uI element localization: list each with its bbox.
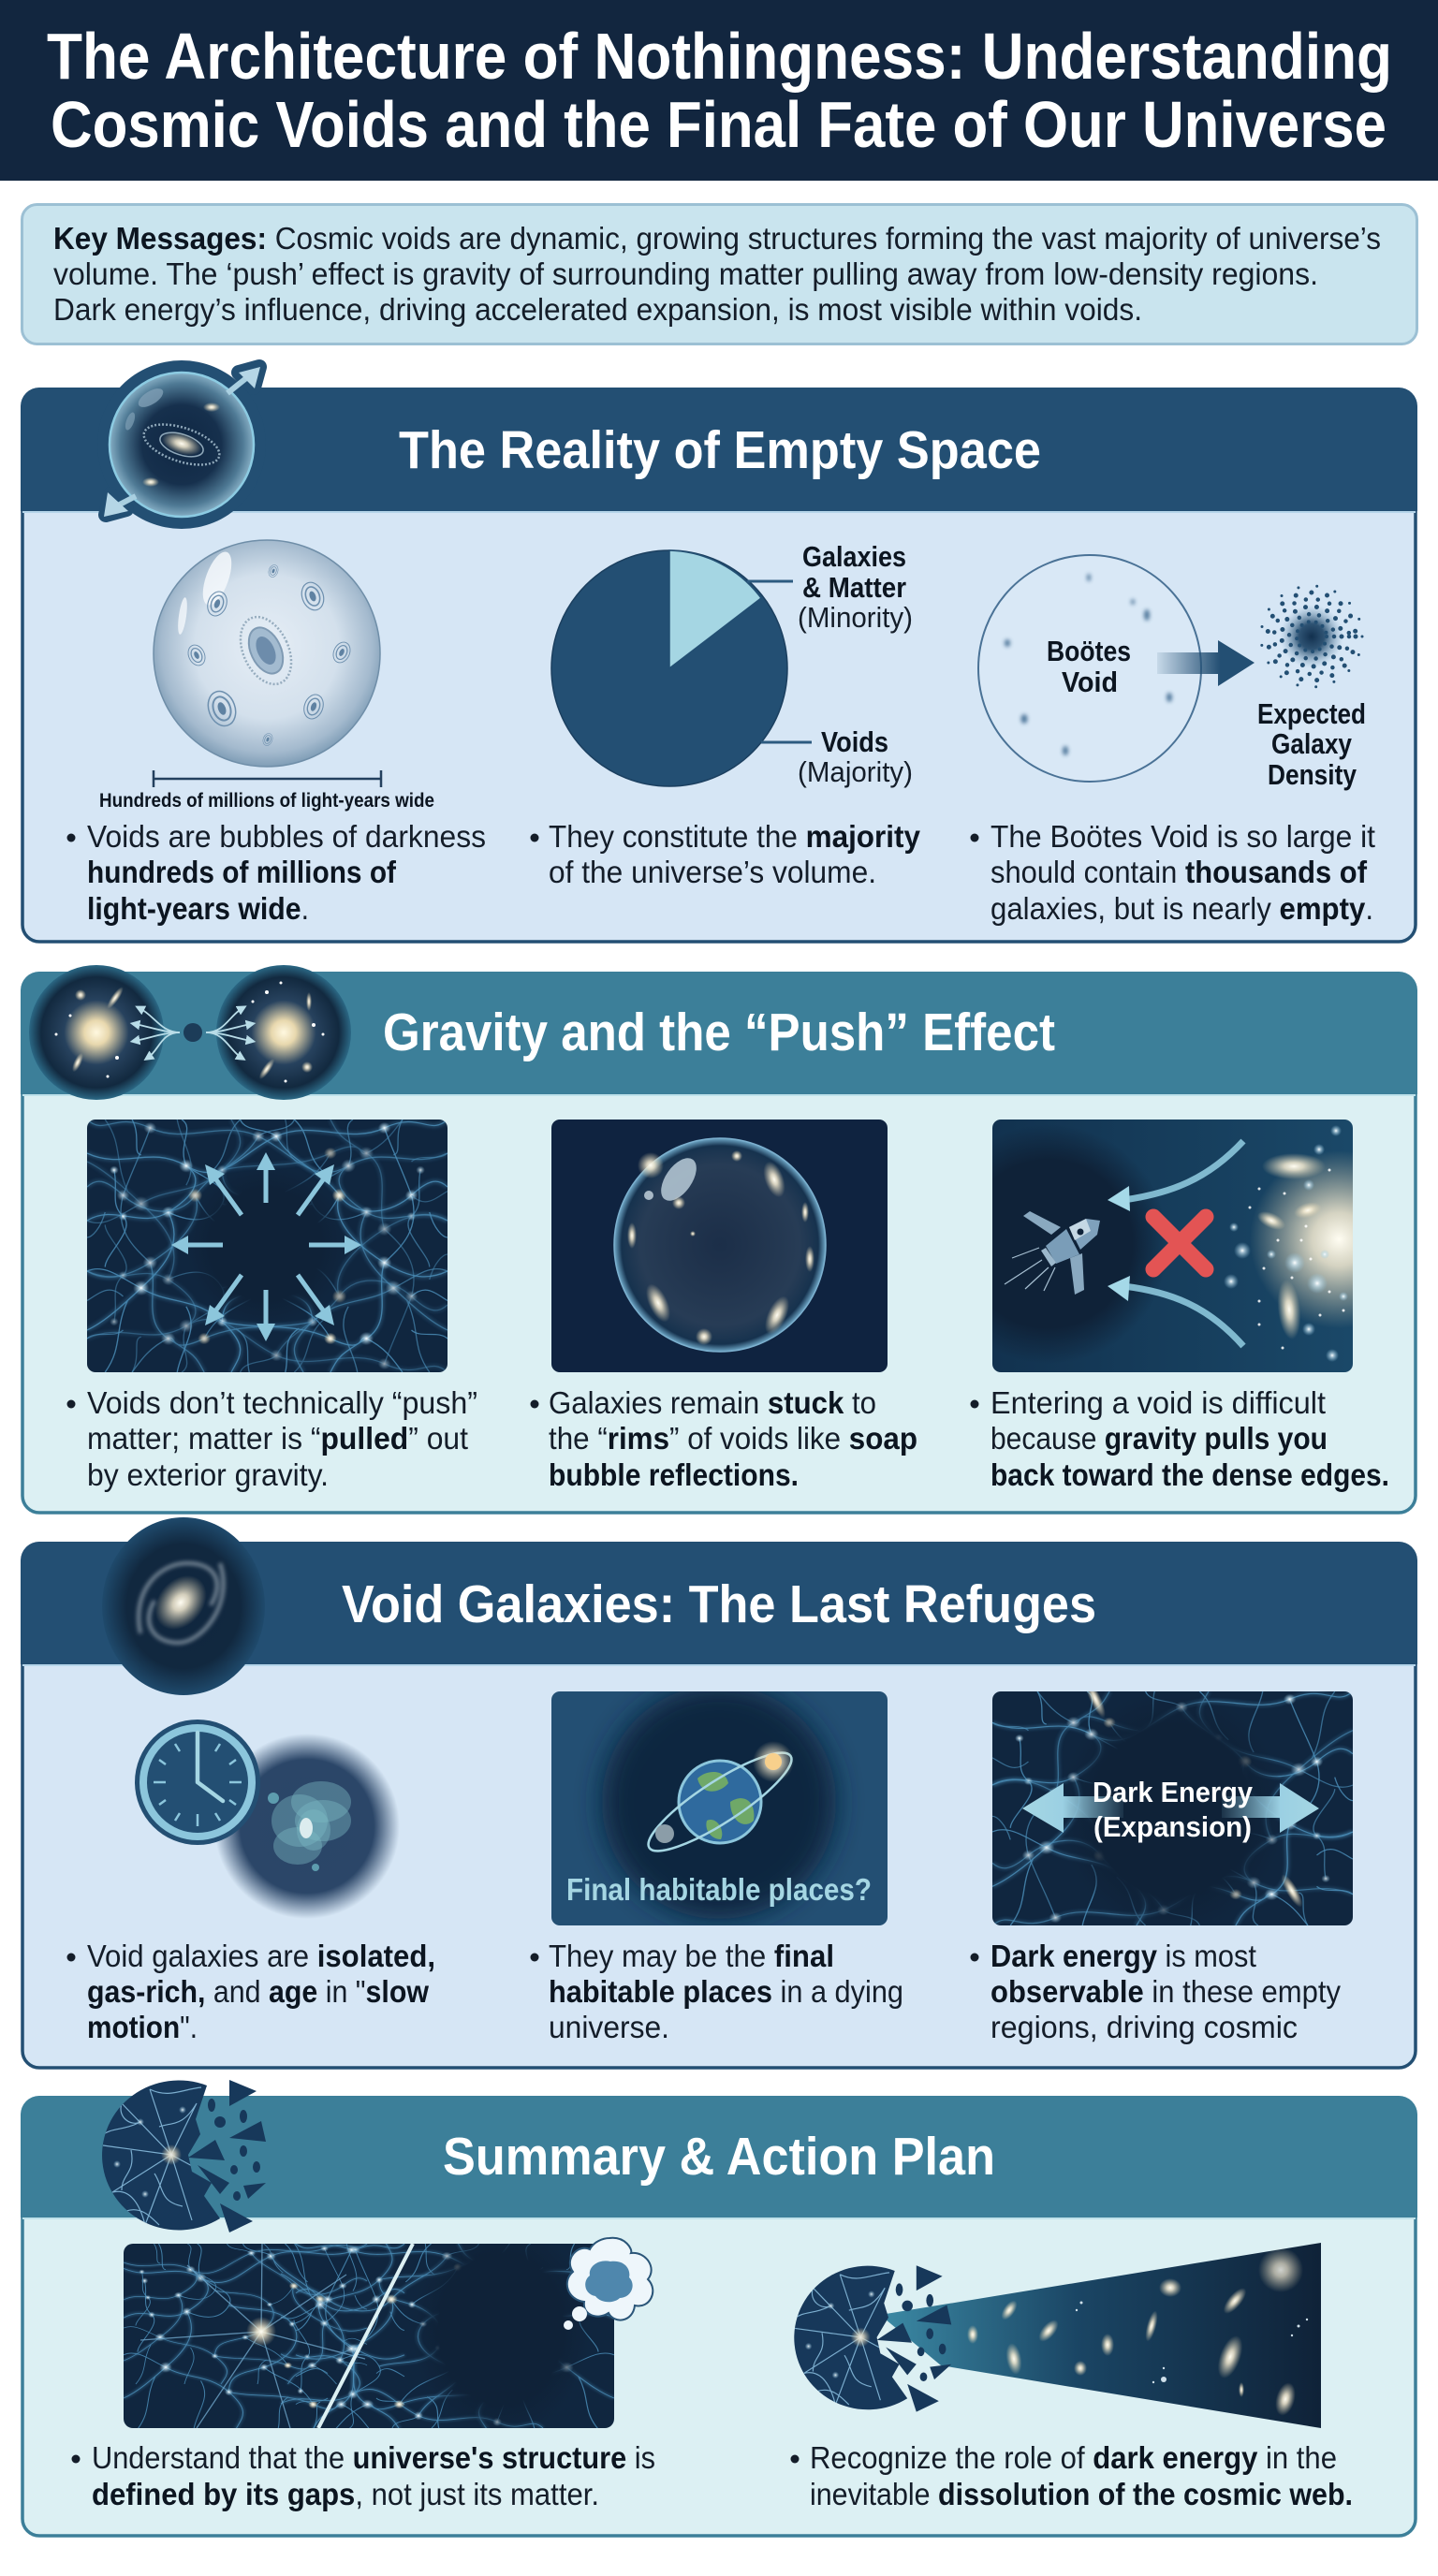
image: void with outward arrows in the cosmic web	[87, 1120, 448, 1372]
bullet: galaxies stuck to rims	[530, 1385, 917, 1492]
bullet: bubbles of darkness: Voids are bubbles of darkness	[87, 819, 486, 854]
illustration: bootes void vs expected density: Galaxy	[1271, 727, 1353, 760]
bullet: matter is pulled: by exterior gravity.	[87, 1457, 329, 1492]
panel: the reality of empty space	[21, 360, 1417, 942]
bullet: final habitable places	[530, 1939, 903, 2044]
bullet: defined by its gaps	[71, 2440, 655, 2511]
heading: summary and action plan: Summary & Action Plan	[443, 2127, 995, 2187]
bullet: dark energy observable: Dark energy is most	[990, 1939, 1256, 1973]
bullet: entering a void: Entering a void is difficult	[990, 1385, 1326, 1420]
label: voids: Voids	[821, 725, 888, 758]
image: habitable planet	[551, 1685, 888, 1925]
bullet: matter is pulled: matter; matter is “pulled” out	[87, 1421, 468, 1456]
icon: spiral galaxy	[102, 1517, 265, 1695]
bullet: entering a void	[970, 1385, 1389, 1492]
illustration: bootes void vs expected density: Boötes	[1047, 635, 1131, 667]
bullet: role of dark energy: Recognize the role of dark energy in the	[810, 2440, 1337, 2475]
image: dark energy expansion: Dark Energy	[1093, 1776, 1254, 1808]
bullet: bootes void	[970, 819, 1375, 926]
icon: earth with orbit	[638, 1739, 801, 1865]
image: web with a void and thought bubble	[124, 2237, 653, 2428]
bullet: matter is pulled: Voids don’t technically “push”	[87, 1385, 477, 1420]
label: galaxies and matter: (Minority)	[798, 601, 913, 634]
bullet: bootes void: should contain thousands of	[990, 855, 1368, 889]
arrows: matter pulled outward	[171, 1152, 361, 1341]
icon: thought bubble	[564, 2238, 653, 2330]
bullet: matter is pulled	[67, 1385, 477, 1492]
bullet: defined by its gaps: defined by its gaps, not just its matter.	[92, 2477, 599, 2511]
bullet: final habitable places: universe.	[549, 2010, 669, 2044]
heading: gravity and the push effect: Gravity and the “Push” Effect	[383, 1003, 1055, 1062]
heading: void galaxies: Void Galaxies: The Last Refuges	[342, 1574, 1096, 1634]
illustration: bootes void vs expected density: Density	[1268, 758, 1357, 791]
bullet: galaxies stuck to rims: the “rims” of voids like soap	[549, 1421, 917, 1456]
panel: void galaxies	[21, 1517, 1417, 2068]
illustration: cosmic web dissolving	[793, 2243, 1321, 2428]
image: soap bubble with galaxies on the rim	[551, 1120, 888, 1372]
arrows: expansion	[1022, 1783, 1123, 1833]
image: spacecraft blocked from entering a void	[992, 1120, 1353, 1372]
bullet: bubbles of darkness	[67, 819, 486, 926]
bullet: isolated galaxies: Void galaxies are isolated,	[87, 1939, 435, 1973]
bullet: galaxies stuck to rims: Galaxies remain stuck to	[549, 1385, 876, 1420]
bullet: role of dark energy: inevitable dissolution of the cosmic web.	[810, 2477, 1353, 2511]
icon: spacecraft	[1005, 1211, 1100, 1295]
illustration: bootes void vs expected density: Void	[1062, 666, 1118, 698]
label: voids: (Majority)	[798, 755, 913, 788]
panel: summary and action plan	[21, 2080, 1417, 2536]
bullet: majority of volume: of the universe’s volume.	[549, 855, 876, 889]
bullet: role of dark energy	[790, 2440, 1353, 2511]
label: galaxies and matter: Galaxies	[802, 540, 906, 573]
bullet: bubbles of darkness: light-years wide.	[87, 891, 309, 926]
image: dark energy expansion: (Expansion)	[1093, 1810, 1252, 1843]
icon: expected galaxy density cloud	[1261, 586, 1362, 687]
bullet: entering a void: back toward the dense edges.	[990, 1457, 1389, 1492]
bullet: dark energy observable: observable in these empty	[990, 1974, 1341, 2009]
illustration: void bubble with galaxies	[154, 540, 380, 767]
header band	[0, 0, 1438, 181]
bullet: isolated galaxies: motion".	[87, 2010, 198, 2044]
label: galaxies and matter: & Matter	[802, 571, 906, 604]
bullet: majority of volume	[530, 819, 921, 889]
bullet: isolated galaxies	[67, 1939, 435, 2044]
key messages callout: Key Messages: Cosmic voids are dynamic, growing structures forming the vast majority of universe’s	[53, 221, 1381, 256]
icon: clock and gas-rich galaxy	[135, 1720, 400, 1919]
illustration: bootes void vs expected density	[978, 555, 1366, 791]
bullet: isolated galaxies: gas-rich, and age in "slow	[87, 1974, 429, 2009]
bullet: dark energy observable	[970, 1939, 1341, 2044]
pie chart: voids vs matter	[551, 540, 913, 788]
image: dark energy expansion	[992, 1678, 1353, 1933]
icon: red x	[1153, 1217, 1206, 1269]
bullet: bubbles of darkness: hundreds of millions of	[87, 855, 397, 889]
bullet: majority of volume: They constitute the majority	[549, 819, 921, 854]
key messages callout: volume. The ‘push’ effect is gravity of surrounding matter pulling away from low-density regions.	[53, 256, 1318, 291]
label: voids	[798, 725, 913, 788]
image: habitable planet: Final habitable places?	[566, 1872, 872, 1907]
bullet: final habitable places: habitable places in a dying	[549, 1974, 903, 2009]
panel: gravity and the push effect	[21, 965, 1428, 1513]
icon: shattering cosmic web	[101, 2080, 266, 2232]
bullet: entering a void: because gravity pulls you	[990, 1421, 1328, 1456]
dissolving galaxies	[967, 2247, 1308, 2418]
label: galaxies and matter	[798, 540, 913, 634]
bullet: dark energy observable: regions, driving cosmic	[990, 2010, 1298, 2044]
scale bar: Hundreds of millions of light-years wide	[99, 790, 434, 812]
arrow	[1157, 640, 1255, 686]
icon: expanding bubble with galaxy	[97, 360, 266, 529]
title	[47, 20, 1392, 161]
bullet: galaxies stuck to rims: bubble reflections.	[549, 1457, 799, 1492]
bullet: bootes void: galaxies, but is nearly empty.	[990, 891, 1373, 926]
icon: two clusters pulling on a void	[29, 965, 351, 1100]
heading: the reality of empty space: The Reality of Empty Space	[399, 420, 1041, 480]
arrows: gravity pulling back	[1108, 1141, 1243, 1346]
bullet: defined by its gaps: Understand that the universe's structure is	[92, 2440, 655, 2475]
scale bar	[99, 770, 434, 812]
key messages callout	[22, 204, 1417, 344]
key messages callout: Dark energy’s influence, driving accelerated expansion, is most visible within voids.	[53, 292, 1142, 327]
bullet: final habitable places: They may be the final	[549, 1939, 834, 1973]
illustration: bootes void vs expected density: Expected	[1257, 697, 1366, 730]
bullet: bootes void: The Boötes Void is so large it	[990, 819, 1375, 854]
